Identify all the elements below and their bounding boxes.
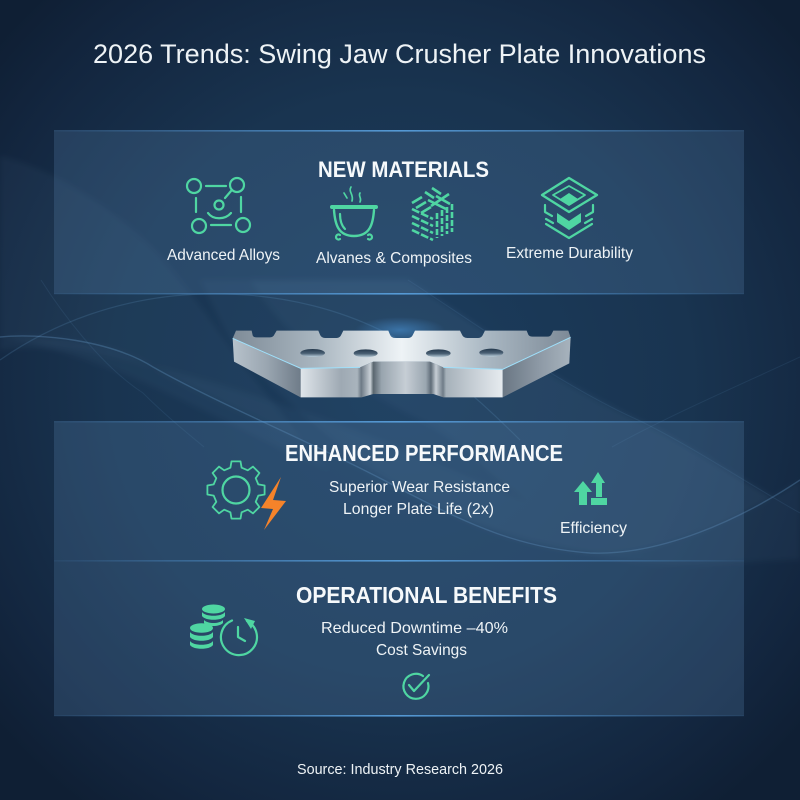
front face: [301, 362, 503, 397]
illustration: swing jaw plate: [233, 317, 571, 397]
right bevel: [503, 337, 571, 397]
heading: enhanced performance: ENHANCED PERFORMANCE: [285, 440, 563, 466]
edge highlight: [233, 337, 571, 369]
text: cost savings: Cost Savings: [376, 642, 467, 659]
panel: enhanced performance and operational benefits: [54, 421, 744, 717]
icon: efficiency arrows: [574, 472, 607, 505]
title: 2026 Trends: Swing Jaw Crusher Plate Innovations: [93, 39, 706, 69]
icon: coins and clock: [190, 604, 257, 655]
icon: check circle: [403, 674, 429, 699]
top face: [233, 331, 571, 369]
left bevel: [233, 338, 301, 397]
source: Source: Industry Research 2026: [297, 761, 503, 778]
text: superior wear resistance: Superior Wear Resistance: [329, 479, 510, 496]
text: reduced downtime: Reduced Downtime –40%: [321, 620, 508, 637]
panel: new materials: [54, 130, 744, 295]
label: extreme durability: Extreme Durability: [506, 245, 633, 262]
icon: lightning bolt: [261, 477, 286, 530]
icon: composite weave: [412, 188, 452, 240]
label: efficiency: Efficiency: [560, 520, 627, 537]
heading: new materials: NEW MATERIALS: [318, 157, 489, 182]
icon: gear: [207, 461, 265, 519]
icon: cauldron: [332, 187, 376, 240]
label: advanced alloys: Advanced Alloys: [167, 247, 280, 264]
label: alvanes and composites: Alvanes & Composites: [316, 250, 472, 267]
heading: operational benefits: OPERATIONAL BENEFITS: [296, 582, 557, 608]
text: longer plate life: Longer Plate Life (2x): [343, 501, 494, 518]
icon: advanced alloys network: [187, 178, 250, 233]
icon: extreme durability layers: [542, 178, 597, 238]
holes: [300, 349, 325, 357]
